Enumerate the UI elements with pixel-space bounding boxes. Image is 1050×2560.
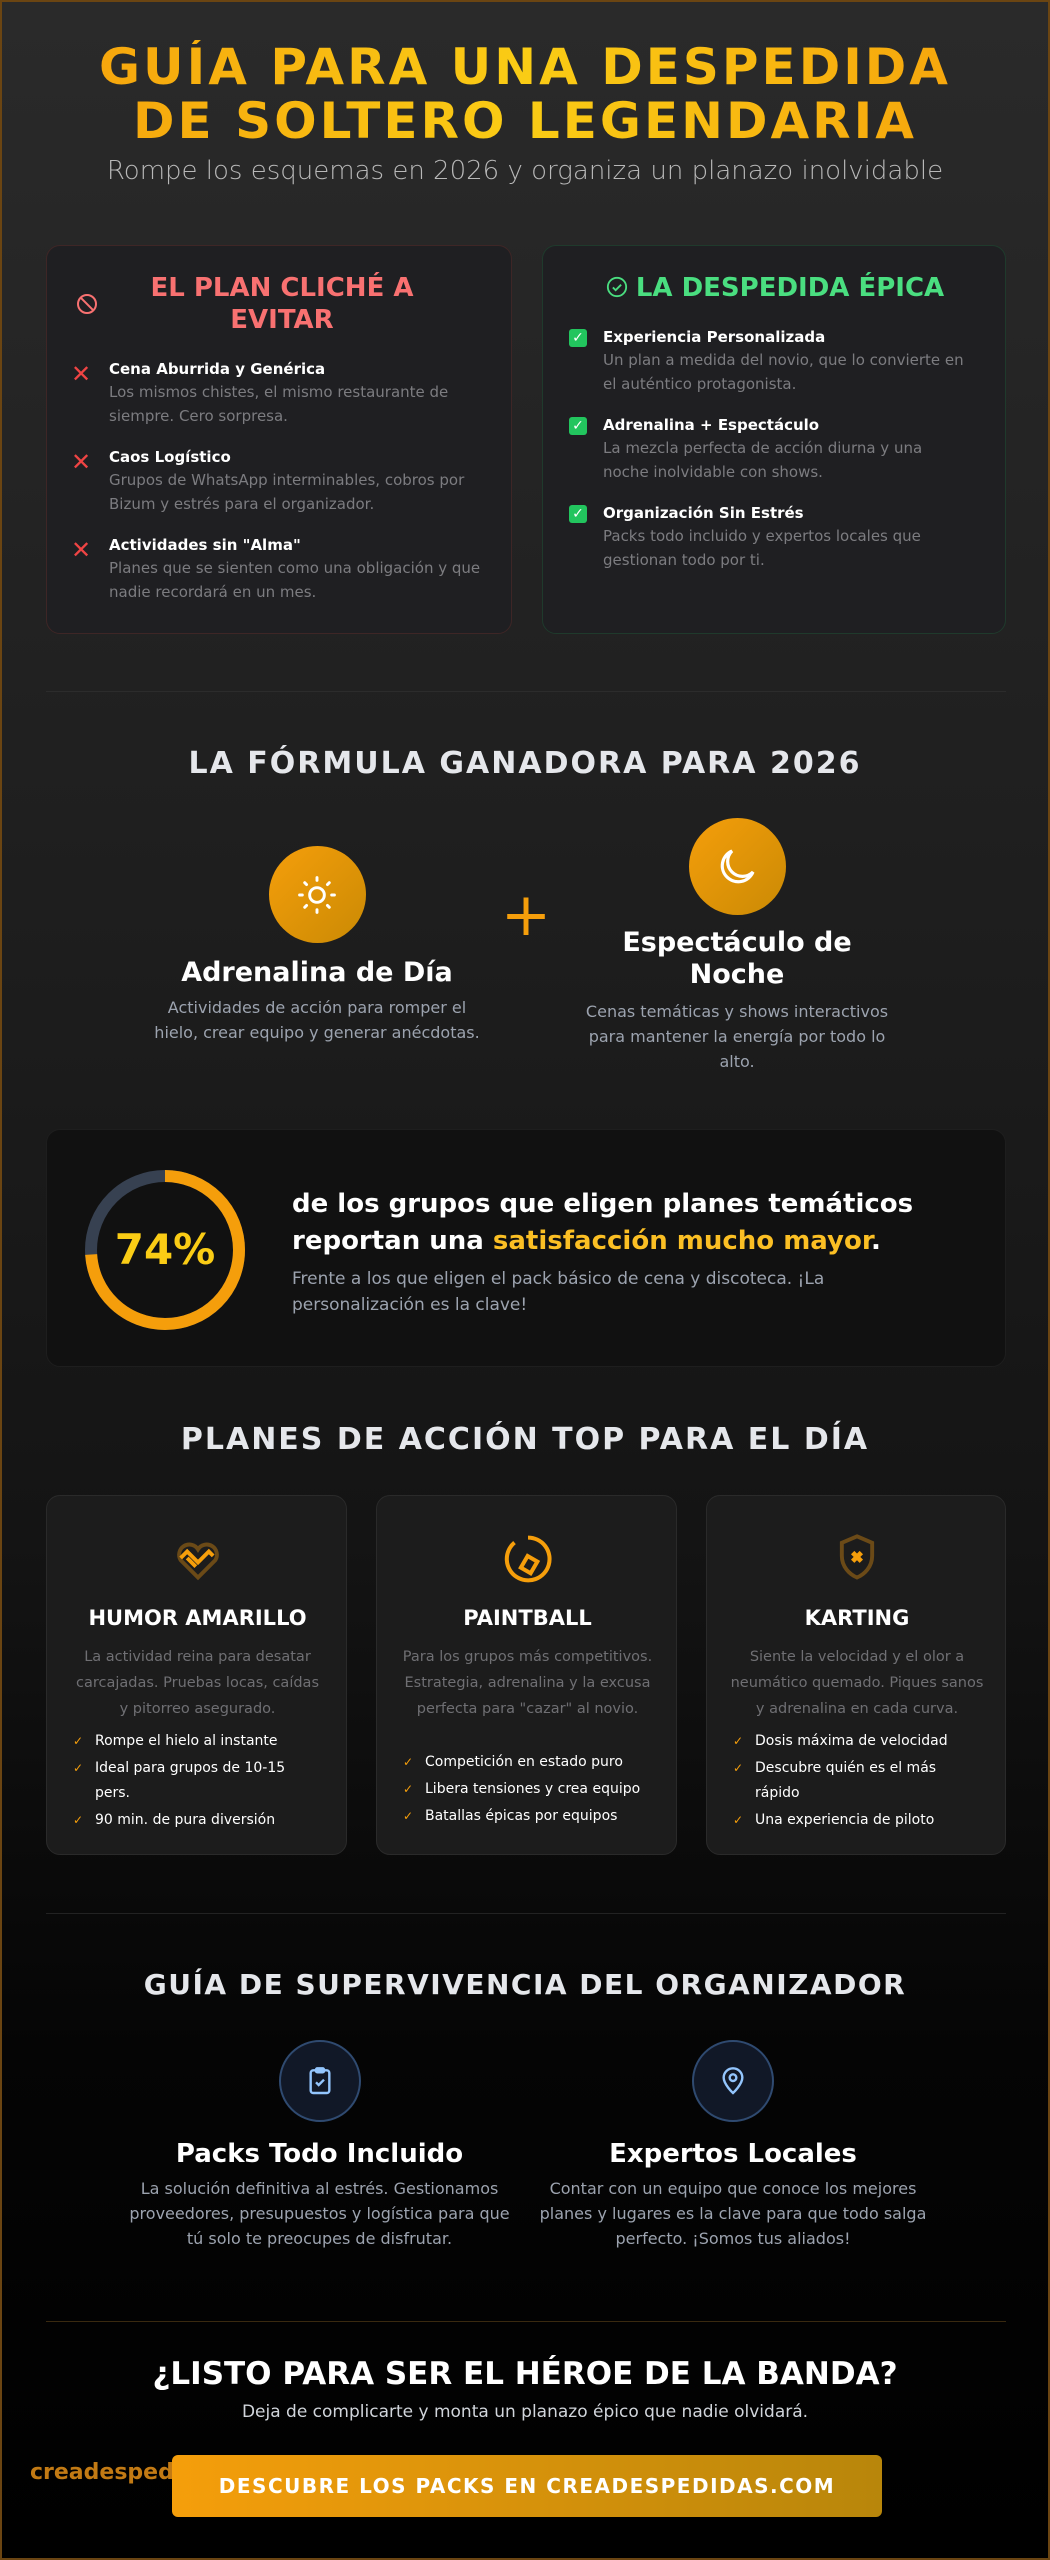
bullets: paintball: Batallas épicas por equipos [425,1808,617,1824]
heading: CTA: ¿LISTO PARA SER EL HÉROE DE LA BANDA? [152,2356,898,2392]
panel: paintball: Para los grupos más competitivos. Estrategia, adrenalina y la excusa perfecta para "cazar" al novio. [403,1649,652,1717]
item list: cliché: Actividades sin "Alma" [109,536,301,554]
bullets: karting [734,1733,948,1828]
bullets: karting: Descubre quién es el más rápido [755,1760,936,1801]
title: GUÍA PARA UNA DESPEDIDA [99,38,951,96]
panel: cliché plan [46,245,512,634]
item list: cliché [71,360,480,601]
icon: clipboard [278,2040,360,2122]
item list: cliché: Planes que se sienten como una obligación y que nadie recordará en un mes. [109,559,480,601]
icon: moon [688,818,786,915]
item list: cliché: Caos Logístico [109,448,231,466]
watermark: creadespedidas.com [30,2460,285,2485]
panel: stat [46,1129,1006,1367]
icon: paintball [504,1536,552,1582]
heading: action plans: PLANES DE ACCIÓN TOP PARA EL DÍA [181,1422,869,1457]
item list: cliché: Grupos de WhatsApp interminables, cobros por Bizum y estrés para el organizador. [109,471,464,513]
bullets: humor: Rompe el hielo al instante [95,1733,278,1749]
button: CTA: DESCUBRE LOS PACKS EN CREADESPEDIDAS.COM [219,2474,835,2498]
heading: formula: LA FÓRMULA GANADORA PARA 2026 [189,746,861,781]
heading: cliché: EL PLAN CLICHÉ A EVITAR [150,273,414,335]
panel: karting: Siente la velocidad y el olor a neumático quemado. Piques sanos y adrenalina en cada curva. [731,1649,983,1717]
heading: survival guide: GUÍA DE SUPERVIVENCIA DEL ORGANIZADOR [144,1968,906,2001]
item list: epic: Packs todo incluido y expertos locales que gestionan todo por ti. [603,527,921,569]
block: packs: La solución definitiva al estrés. Gestionamos proveedores, presupuestos y logística para que tú solo te preocupes de disfrutar. [129,2179,510,2248]
item list: cliché: ✕ [71,536,91,564]
panel: karting: KARTING [805,1606,909,1630]
bullets: paintball [404,1754,640,1824]
block: experts: Expertos Locales [609,2139,857,2169]
block: night: Cenas temáticas y shows interactivos para mantener la energía por todo lo alto. [586,1002,888,1071]
text: stat [292,1189,913,1315]
block: night: Espectáculo de Noche [622,927,852,990]
bullets: humor: 90 min. de pura diversión [95,1812,275,1828]
icon: sun [268,846,366,943]
icon: shield [840,1534,874,1580]
item list: cliché: Cena Aburrida y Genérica [109,360,325,378]
item list: epic: Adrenalina + Espectáculo [603,416,819,434]
block: packs: Packs Todo Incluido [176,2139,463,2169]
item list: cliché: ✕ [71,448,91,476]
block: day [154,846,480,1042]
title: DE SOLTERO LEGENDARIA [133,92,917,150]
item list: epic: La mezcla perfecta de acción diurna y una noche inolvidable con shows. [603,439,922,481]
block: night [586,818,888,1071]
text: CTA sub: Deja de complicarte y monta un planazo épico que nadie olvidará. [242,2402,808,2422]
text: stat: Frente a los que eligen el pack básico de cena y discoteca. ¡La personalización es la clave! [292,1269,824,1315]
item list: epic: Un plan a medida del novio, que lo convierte en el auténtico protagonista. [603,351,964,393]
panel: humor amarillo: La actividad reina para desatar carcajadas. Pruebas locas, caídas y pitorreo asegurado. [76,1649,319,1717]
panel: paintball [376,1495,677,1855]
text: stat: de los grupos que eligen planes temáticos reportan una satisfacción mucho mayor. [292,1189,913,1256]
icon: forbidden [77,294,97,314]
icon: plus: + [501,880,551,950]
heading: epic: LA DESPEDIDA ÉPICA [636,273,944,303]
block: packs [129,2040,510,2248]
block: experts: Contar con un equipo que conoce los mejores planes y lugares es la clave para que todo salga perfecto. ¡Somos tus aliados! [540,2179,926,2248]
bullets: karting: Dosis máxima de velocidad [755,1733,948,1749]
bullets: karting: Una experiencia de piloto [755,1812,934,1828]
item list: cliché: ✕ [71,360,91,388]
item list: cliché: Los mismos chistes, el mismo restaurante de siempre. Cero sorpresa. [109,383,448,425]
block: day: Adrenalina de Día [181,957,453,988]
subtitle: Rompe los esquemas en 2026 y organiza un planazo inolvidable [107,156,943,186]
item list: epic: ✓ [572,418,584,434]
icon: map pin [692,2040,774,2122]
block: day: Actividades de acción para romper el hielo, crear equipo y generar anécdotas. [154,998,480,1042]
panel: paintball: PAINTBALL [463,1606,592,1630]
item list: epic: ✓ [572,506,584,522]
item list: epic: Organización Sin Estrés [603,504,804,522]
chart: donut 74% [85,1170,245,1330]
block: experts [540,2040,926,2248]
item list: epic: Experiencia Personalizada [603,328,825,346]
item list: epic: ✓ [572,330,584,346]
bullets: paintball: Libera tensiones y crea equipo [425,1781,640,1797]
item list: epic [569,328,964,569]
panel: epic plan [542,245,1006,634]
icon: heart [177,1542,219,1580]
chart: donut 74%: 74% [115,1225,215,1274]
bullets: paintball: Competición en estado puro [425,1754,623,1770]
panel: humor amarillo: HUMOR AMARILLO [88,1606,307,1630]
button: CTA [172,2455,882,2517]
panel: karting [706,1495,1006,1855]
panel: humor amarillo [46,1495,347,1855]
bullets: humor [74,1733,285,1828]
title [2,40,1048,148]
bullets: humor: Ideal para grupos de 10-15 pers. [95,1760,285,1801]
